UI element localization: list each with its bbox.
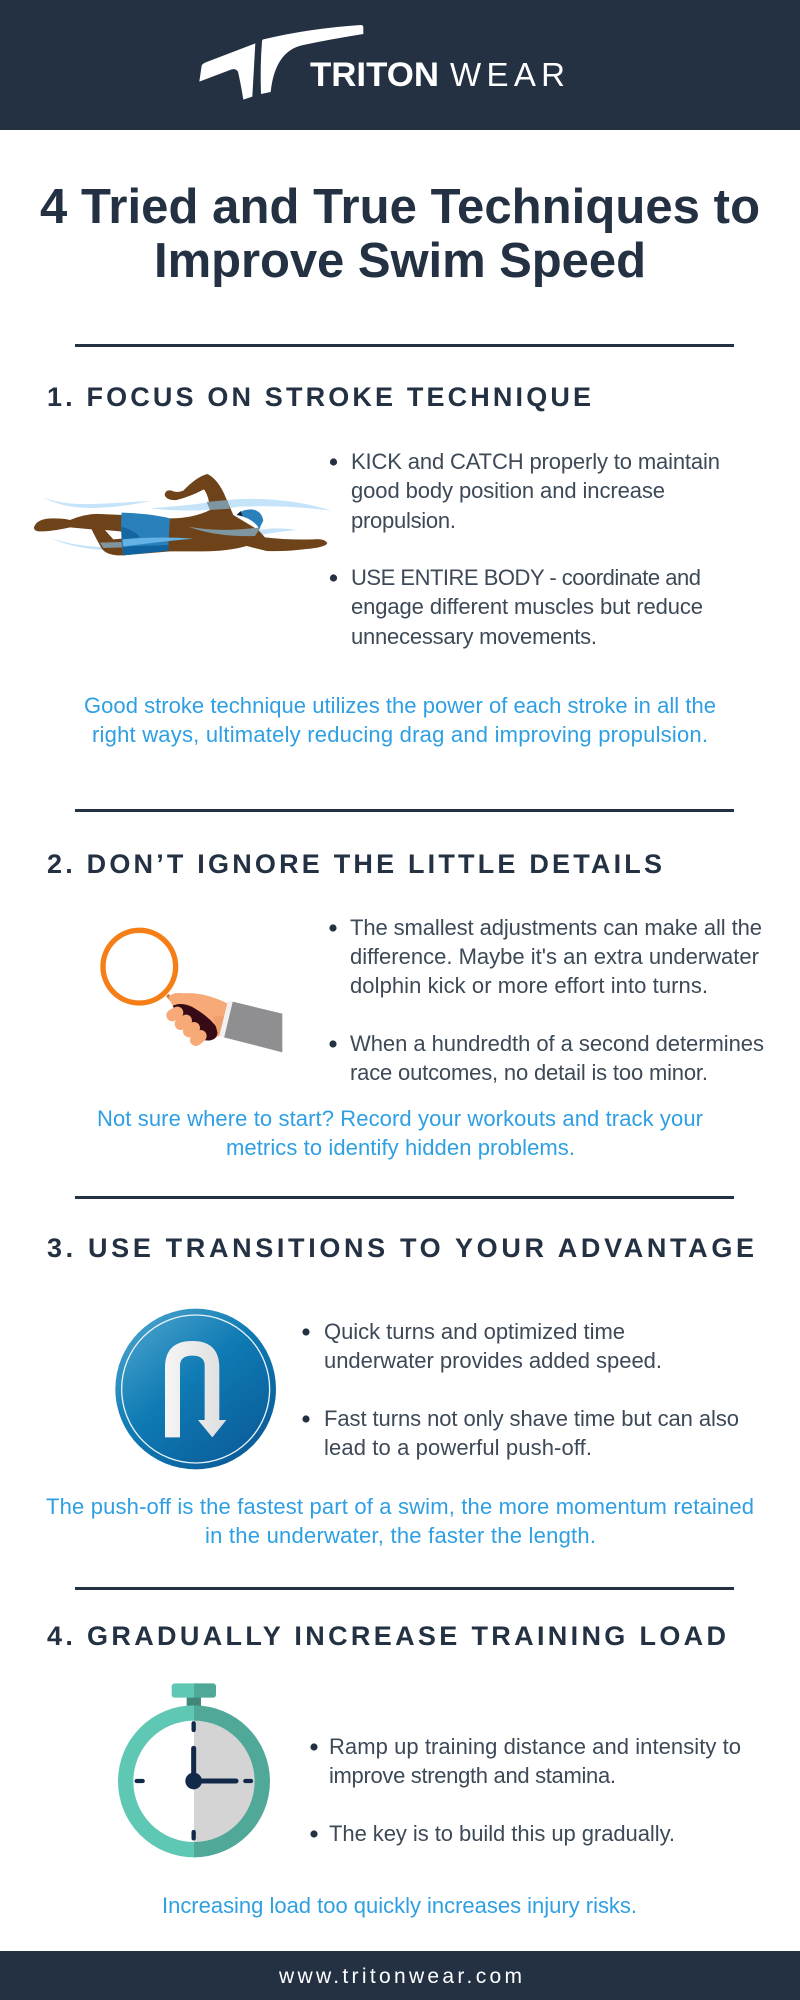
divider 2 [75,809,734,812]
logo wordmark: WEAR [450,56,565,93]
callout training load: Increasing load too quickly increases injury risks. [162,1893,637,1918]
bullets stroke technique: USE ENTIRE BODY - coordinate and [351,565,701,590]
bullets transitions: Quick turns and optimized time [324,1319,625,1344]
panel: section 3 transitions [46,1233,754,1548]
title [40,180,760,288]
bullets little details: difference. Maybe it's an extra underwater [350,944,759,969]
header band with logo [0,0,800,130]
heading 2: 2. DON’T IGNORE THE LITTLE DETAILS [47,849,662,879]
bullets training load: improve strength and stamina. [329,1763,616,1788]
icon: stopwatch [118,1683,270,1857]
bullets transitions: Fast turns not only shave time but can also [324,1406,739,1431]
heading 3: 3. USE TRANSITIONS TO YOUR ADVANTAGE [47,1233,754,1263]
bullets transitions [302,1319,739,1460]
bullets stroke technique: KICK and CATCH properly to maintain [351,449,720,474]
bullets stroke technique: unnecessary movements. [351,624,597,649]
heading 4: 4. GRADUALLY INCREASE TRAINING LOAD [47,1621,726,1651]
bullets stroke technique: good body position and increase [351,478,665,503]
bullets little details: dolphin kick or more effort into turns. [350,973,708,998]
icon: U-turn arrow badge [115,1309,276,1469]
footer band [0,1951,800,2000]
divider 1 [75,344,734,347]
icon: magnifying glass in hand [103,930,282,1052]
callout transitions: The push-off is the fastest part of a swim, the more momentum retained [46,1494,754,1519]
title: Improve Swim Speed [154,234,646,288]
bullets little details [329,915,764,1085]
logo wordmark: TRITON [310,56,439,94]
bullets training load: The key is to build this up gradually. [329,1821,675,1846]
bullets training load: Ramp up training distance and intensity to [329,1734,741,1759]
bullets transitions: lead to a powerful push-off. [324,1435,592,1460]
callout little details: metrics to identify hidden problems. [226,1135,575,1160]
bullets stroke technique [330,449,720,649]
callout stroke technique [84,693,716,747]
callout stroke technique: Good stroke technique utilizes the power of each stroke in all the [84,693,716,718]
footer url: www.tritonwear.com [278,1965,522,1988]
panel: section 4 training load [47,1621,741,1918]
callout stroke technique: right ways, ultimately reducing drag and improving propulsion. [92,722,708,747]
callout transitions: in the underwater, the faster the length. [205,1523,596,1548]
heading 1: 1. FOCUS ON STROKE TECHNIQUE [47,382,591,412]
icon: swimmer [34,474,332,555]
title: 4 Tried and True Techniques to [40,180,760,234]
callout little details [97,1106,703,1160]
bullets little details: The smallest adjustments can make all the [350,915,762,940]
divider 4 [75,1587,734,1590]
panel: section 2 little details [47,849,764,1160]
bullets training load [310,1734,741,1846]
bullets little details: race outcomes, no detail is too minor. [350,1060,708,1085]
bullets little details: When a hundredth of a second determines [350,1031,764,1056]
bullets stroke technique: engage different muscles but reduce [351,594,703,619]
callout transitions [46,1494,754,1548]
bullets stroke technique: propulsion. [351,508,456,533]
panel: section 1 stroke technique [34,382,720,747]
icon: Triton logo mark [199,25,363,100]
bullets transitions: underwater provides added speed. [324,1348,662,1373]
callout little details: Not sure where to start? Record your workouts and track your [97,1106,703,1131]
divider 3 [75,1196,734,1199]
logo wordmark [310,56,565,94]
